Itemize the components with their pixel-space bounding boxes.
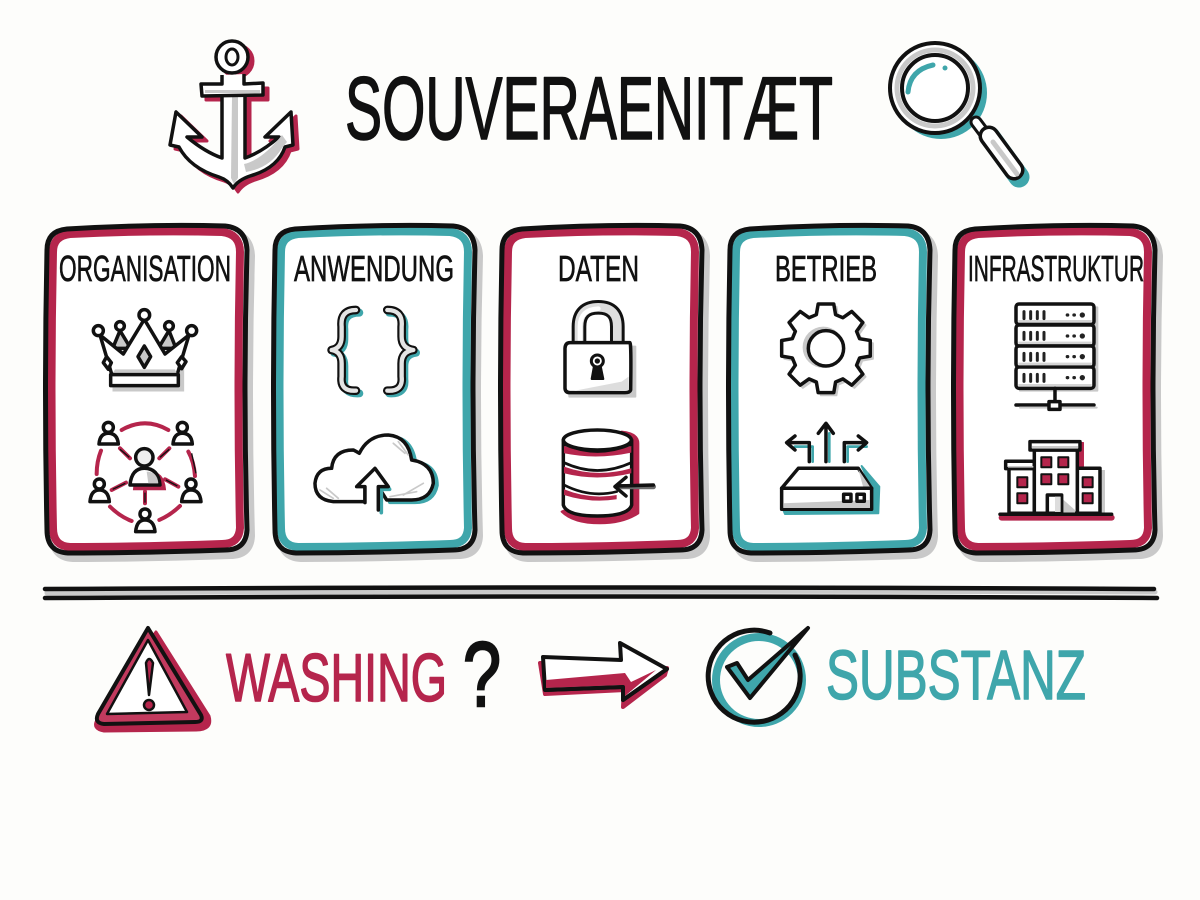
panel: Anwendung — [274, 225, 480, 559]
panel: Organisation — [46, 225, 252, 559]
icon: magnifying glass — [890, 43, 1019, 177]
panel: Betrieb — [728, 225, 935, 559]
icon: check mark in circle — [708, 628, 808, 723]
icon: database with arrow — [562, 430, 653, 523]
panel: Infrastruktur — [954, 225, 1160, 559]
heading: DATEN — [558, 248, 639, 289]
icon: network of people — [90, 422, 201, 532]
icon: office building — [1000, 442, 1112, 518]
arrow — [540, 643, 667, 707]
icon: router with arrows — [782, 423, 879, 514]
question mark: ? — [463, 624, 501, 726]
icon: gear — [782, 304, 873, 395]
label: Washing: WASHING — [226, 640, 447, 716]
heading: BETRIEB — [775, 248, 877, 289]
label: Substanz: SUBSTANZ — [826, 636, 1086, 714]
icon: crown — [93, 310, 197, 390]
panel: Daten — [500, 225, 707, 559]
icon: padlock — [565, 307, 635, 397]
icon: curly braces — [332, 310, 416, 393]
icon: cloud upload — [315, 435, 437, 513]
icon: anchor — [170, 41, 298, 192]
icon: warning triangle — [96, 628, 210, 731]
heading: ORGANISATION — [59, 248, 231, 289]
title: SOUVERAENITÆT — [345, 58, 833, 158]
icon: server rack — [1016, 304, 1097, 409]
heading: ANWENDUNG — [294, 248, 454, 289]
